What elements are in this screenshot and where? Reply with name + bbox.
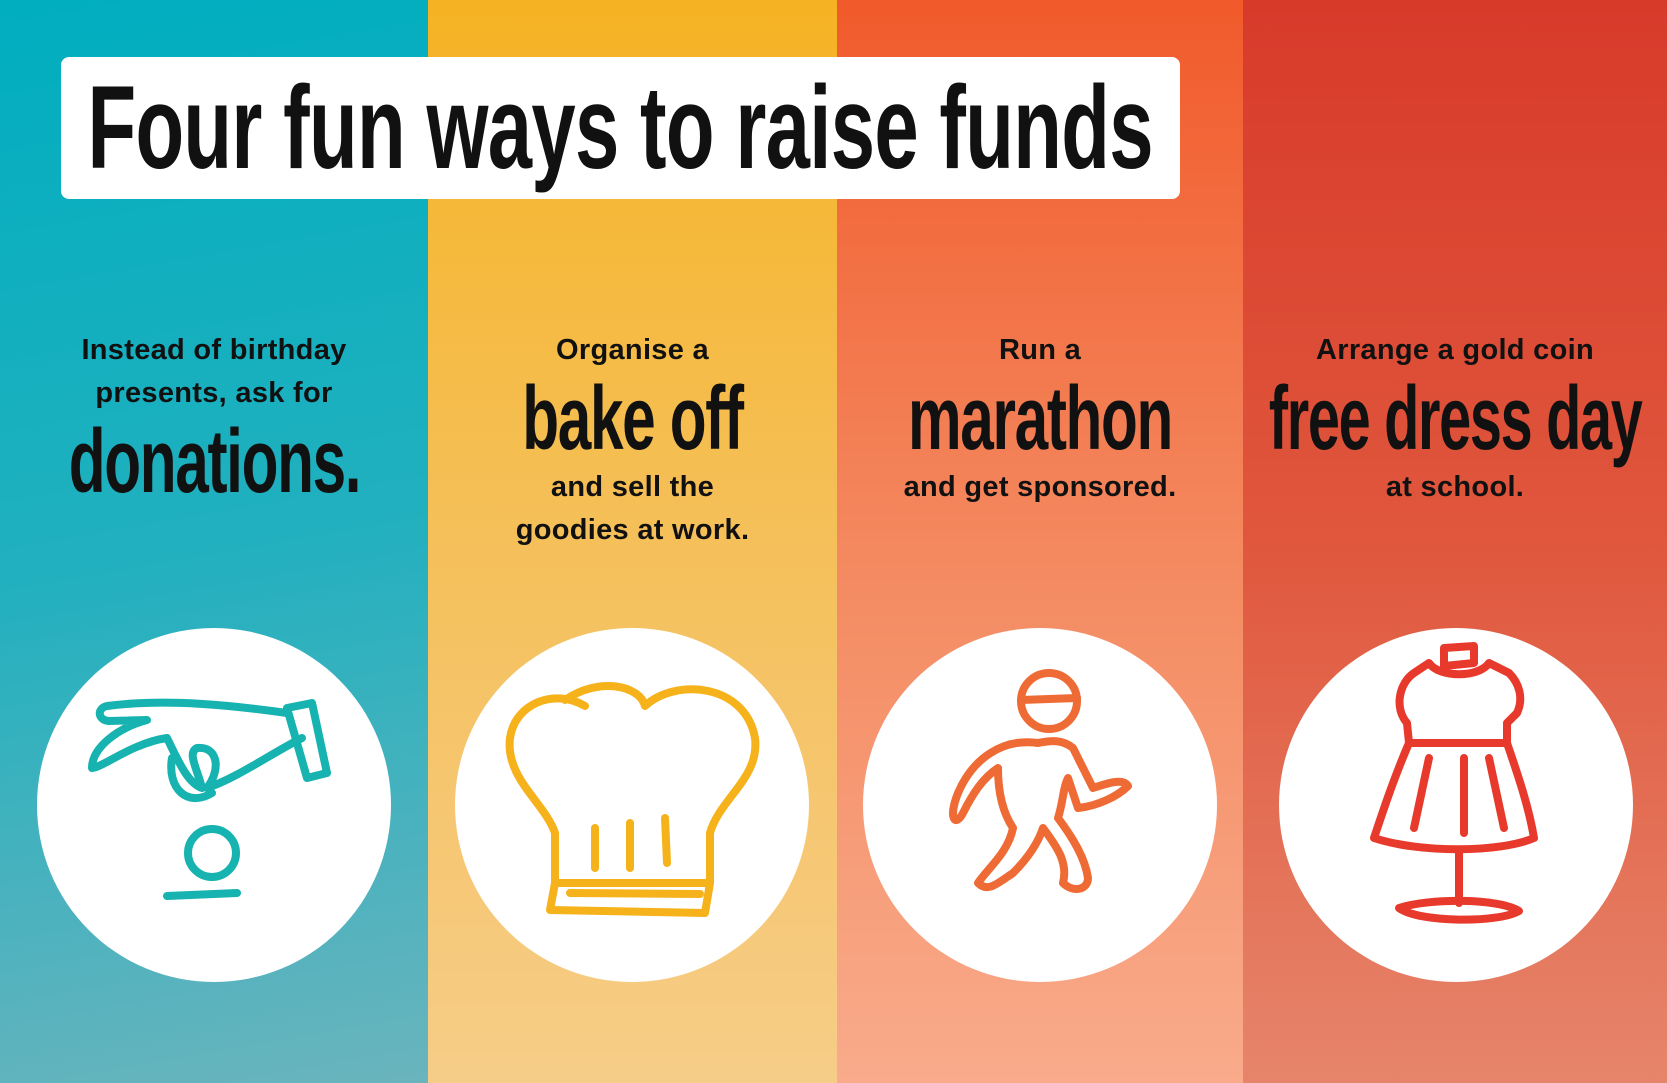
text: bake off <box>516 334 749 546</box>
text: free dress day <box>1269 334 1642 503</box>
text: donations <box>68 334 360 512</box>
text: marathon: and get sponsored. <box>904 471 1176 503</box>
icon: chef hat <box>455 628 809 982</box>
text: free dress day: Arrange a gold coin <box>1316 334 1594 366</box>
panel: bake off column <box>428 0 837 1083</box>
text: bake off: goodies at work. <box>516 514 749 546</box>
text: marathon: marathon <box>908 369 1172 469</box>
panel: free dress day column <box>1243 0 1667 1083</box>
panel: marathon column <box>837 0 1243 1083</box>
text: donations: Instead of birthday <box>81 334 347 366</box>
text: marathon <box>904 334 1176 503</box>
text: bake off: Organise a <box>556 334 709 366</box>
title: Four fun ways to raise funds <box>88 62 1153 194</box>
text: donations: donations. <box>68 412 360 512</box>
text: marathon: Run a <box>999 334 1081 366</box>
text: free dress day: free dress day <box>1269 369 1641 469</box>
icon: dress on stand <box>1279 628 1633 982</box>
text: free dress day: at school. <box>1386 471 1524 503</box>
text: donations: presents, ask for <box>95 377 333 409</box>
icon: hand dropping coin <box>37 628 391 982</box>
text: bake off: and sell the <box>551 471 714 503</box>
panel: donations column <box>0 0 428 1083</box>
icon: runner <box>863 628 1217 982</box>
text: bake off: bake off <box>522 369 743 469</box>
